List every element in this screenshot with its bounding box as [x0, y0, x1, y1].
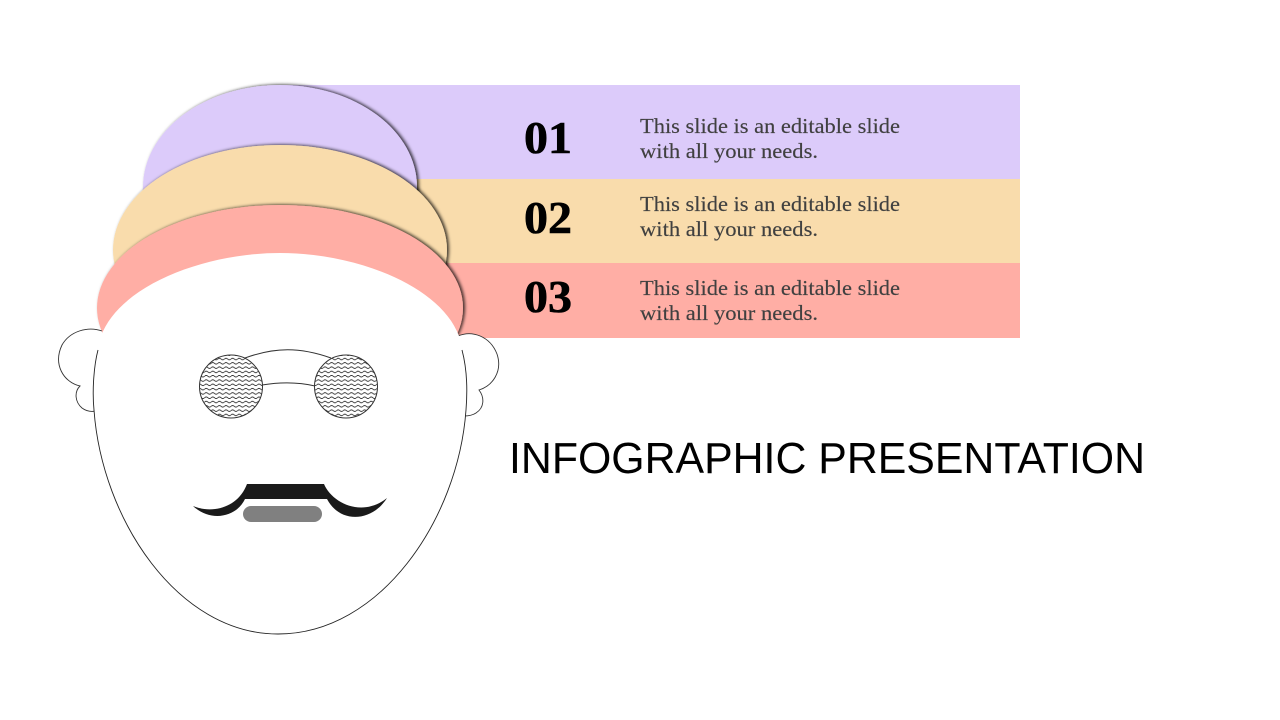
icon: left ear — [59, 329, 102, 411]
text: row 02 description — [640, 192, 900, 241]
text: row 02 description: This slide is an editable slide — [640, 192, 900, 216]
number 03: 03 — [524, 272, 572, 322]
panel: row 02 — [280, 179, 1020, 263]
text: row 03 description — [640, 276, 900, 325]
text: row 01 description: This slide is an editable slide — [640, 114, 900, 138]
text: row 02 description: with all your needs. — [640, 217, 818, 241]
icon: moustache — [193, 484, 387, 517]
icon: mouth — [243, 506, 322, 522]
text: row 01 description: with all your needs. — [640, 139, 818, 163]
hat layer: purple — [143, 85, 417, 289]
text: row 01 description — [640, 114, 900, 163]
hat layer: salmon — [97, 205, 463, 411]
text: row 03 description: with all your needs. — [640, 301, 818, 325]
icon: glasses — [200, 350, 378, 418]
text: row 03 description: This slide is an editable slide — [640, 276, 900, 300]
hat layer: tan — [113, 145, 447, 355]
face — [93, 253, 467, 634]
icon: right ear — [458, 334, 499, 416]
panel: row 03 — [280, 263, 1020, 338]
number 01: 01 — [524, 113, 572, 163]
number 02: 02 — [524, 193, 572, 243]
title: INFOGRAPHIC PRESENTATION — [509, 434, 1145, 483]
panel: row 01 — [280, 85, 1020, 179]
